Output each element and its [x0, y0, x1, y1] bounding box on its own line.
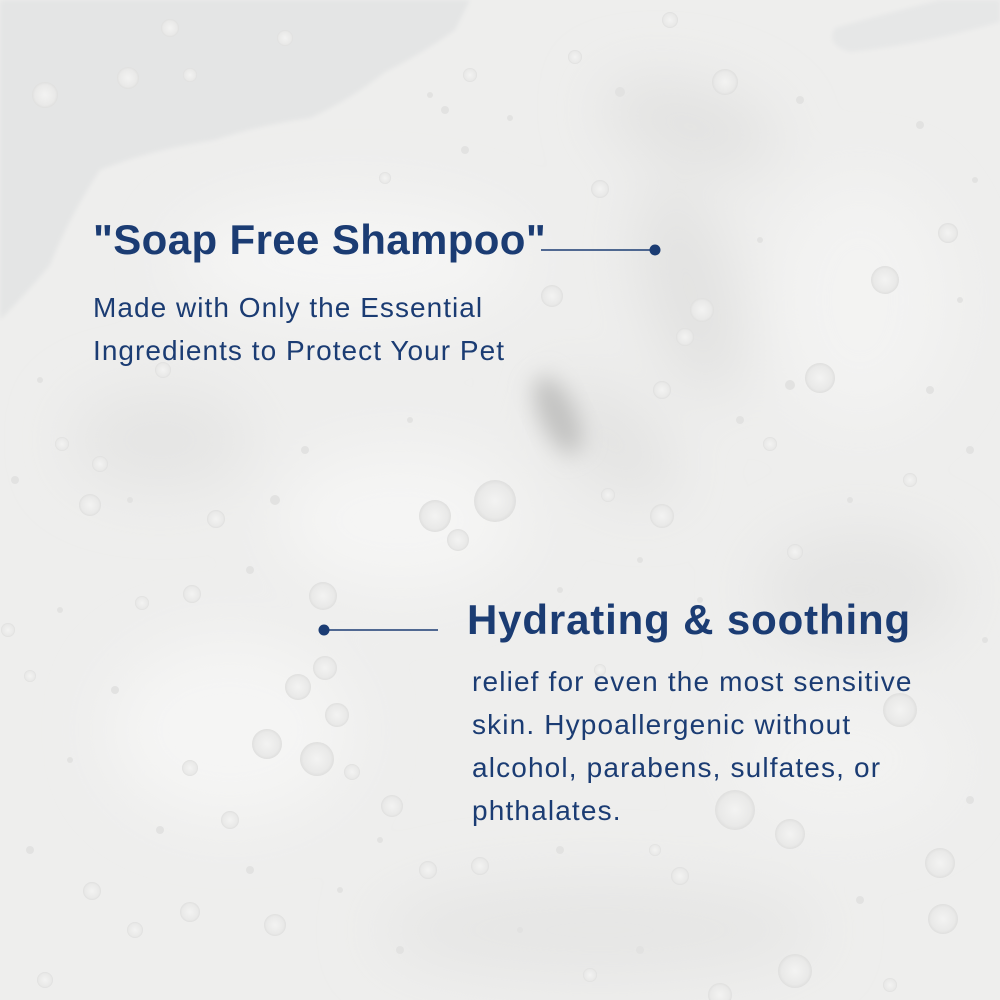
- shadow crease: [524, 369, 592, 461]
- text block: hydrating description: skin. Hypoallergenic without: [472, 709, 851, 740]
- text block: hydrating description: [472, 666, 913, 826]
- top-left smooth liquid area: [0, 0, 470, 320]
- text block: hydrating description: relief for even the most sensitive: [472, 666, 913, 697]
- text block: hydrating description: phthalates.: [472, 795, 622, 826]
- heading: Hydrating & soothing: Hydrating & soothing: [467, 596, 911, 643]
- text block: soap free description: Ingredients to Protect Your Pet: [93, 335, 505, 366]
- text block: soap free description: [93, 292, 505, 366]
- text block: hydrating description: alcohol, parabens, sulfates, or: [472, 752, 881, 783]
- text block: soap free description: Made with Only the Essential: [93, 292, 483, 323]
- heading: Soap Free Shampoo: "Soap Free Shampoo": [93, 216, 546, 263]
